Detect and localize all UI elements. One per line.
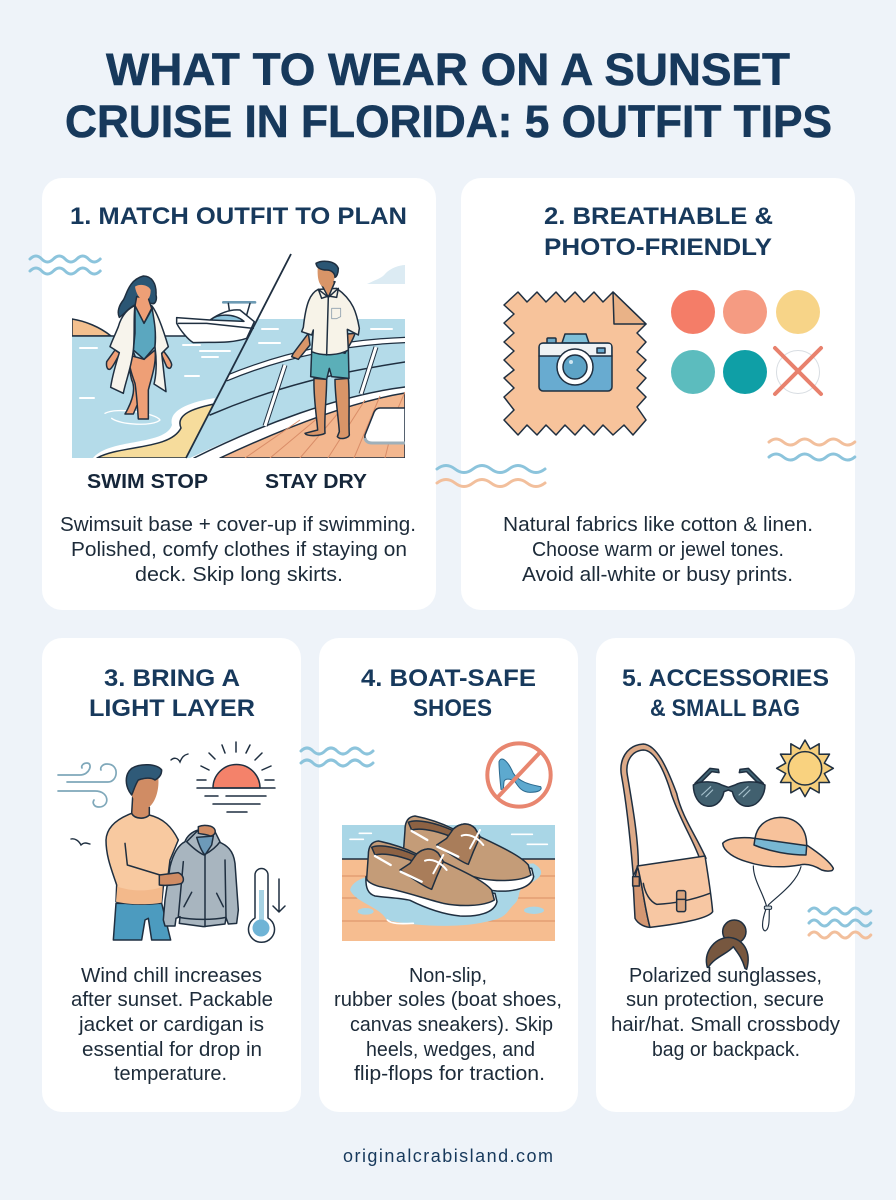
man on deck [292,261,359,438]
panel: 3 bring a light layer [42,638,301,1112]
icon: hair bun [706,920,748,969]
man in sweater [106,765,178,940]
text block: tip 5 description: hair/hat. Small crossbody [611,1014,841,1036]
lounge cushion [365,408,405,443]
panel: 2 breathable and photo-friendly [461,178,855,610]
footer: website: originalcrabisland.com [343,1146,553,1166]
text block: tip 5 description: bag or backpack. [652,1039,800,1061]
icon: no high heels [487,743,551,807]
woman in swimsuit and cover-up [105,276,172,424]
heading: tip 3 [89,665,255,722]
panel: 5 accessories and small bag [596,638,855,1112]
heading: tip 4 [361,665,536,722]
icon: sunset [197,742,275,812]
front shoe [366,841,497,916]
icon: sun hat with chin strap [723,817,833,931]
illustration: wind, sunset and man with jacket [58,742,285,942]
illustration: swim stop and stay dry scene [72,254,406,459]
heading: tip 3: 3. BRING A [104,665,240,692]
heading: tip 4: 4. BOAT-SAFE [361,665,536,692]
text block: tip 5 description: Polarized sunglasses, [629,965,822,987]
text block: tip 3 description: Wind chill increases [81,965,262,987]
icon: fabric swatch with camera [504,292,646,435]
heading: tip 5: 5. ACCESSORIES [622,665,829,692]
text block: tip 4 description: heels, wedges, and [366,1039,535,1061]
text block: tip 2 description: Natural fabrics like cotton & linen. [503,514,813,536]
icon: sun [777,740,833,797]
text block: tip 4 description: rubber soles (boat shoes, [334,989,562,1011]
label: stay dry: STAY DRY [265,471,368,493]
text block: tip 3 description: after sunset. Packable [71,989,273,1011]
title: CRUISE IN FLORIDA: 5 OUTFIT TIPS [65,96,832,147]
decorative waves: panel 5 [809,908,871,938]
text block: tip 2 description: Avoid all-white or busy prints. [522,564,793,586]
text block: tip 4 description: flip-flops for traction. [354,1063,545,1085]
title: WHAT TO WEAR ON A SUNSET [106,44,790,95]
text block: tip 4 description: Non-slip, [409,965,487,987]
cloud [367,265,405,284]
icon: sunglasses [693,768,765,806]
text block: tip 3 description: jacket or cardigan is [78,1014,264,1036]
decorative waves: panel 4 [301,748,373,766]
text block: tip 4 description: canvas sneakers). Skip [350,1014,553,1036]
text block: tip 1 description [60,514,416,586]
text block: tip 5 description: sun protection, secure [626,989,824,1011]
text block: tip 2 description [503,514,813,586]
heading: tip 3: LIGHT LAYER [89,695,255,722]
text block: tip 3 description: temperature. [114,1063,227,1085]
text block: tip 5 description [611,965,841,1061]
panel: 1 match outfit to plan [42,178,436,610]
icon: birds [71,754,188,845]
jacket [159,825,238,927]
text block: tip 3 description [71,965,273,1085]
decorative waves: panel 1 [30,256,100,274]
title [65,44,832,147]
heading: tip 2: 2. BREATHABLE & [544,203,773,230]
heading: tip 2 [544,203,773,261]
text block: tip 3 description: essential for drop in [82,1039,262,1061]
heading: tip 2: PHOTO-FRIENDLY [544,234,772,261]
decorative waves: between panels 1 and 2 [437,466,545,486]
text block: tip 1 description: Polished, comfy clothes if staying on [71,539,407,561]
heading: tip 1: 1. MATCH OUTFIT TO PLAN [70,203,407,230]
icon: thermometer and down arrow [248,868,285,942]
panel: 4 boat-safe shoes [319,638,578,1112]
icon: wind [58,763,116,807]
rear shoe [403,816,534,891]
heading: tip 5: & SMALL BAG [650,695,800,722]
icon: crossed-out white [775,348,821,394]
label: swim stop: SWIM STOP [87,471,208,493]
decorative waves: panel 2 right [769,439,855,460]
heading: tip 5 [622,665,829,722]
heading: tip 4: SHOES [413,695,492,722]
text block: tip 1 description: Swimsuit base + cover-up if swimming. [60,514,416,536]
text block: tip 4 description [334,965,562,1085]
text block: tip 2 description: Choose warm or jewel tones. [532,539,784,561]
colour palette swatches [671,290,821,394]
text block: tip 1 description: deck. Skip long skirts. [135,564,343,586]
illustration: boat shoes on wet deck [342,816,555,941]
icon: crossbody bag [621,744,713,927]
boat [177,302,255,343]
